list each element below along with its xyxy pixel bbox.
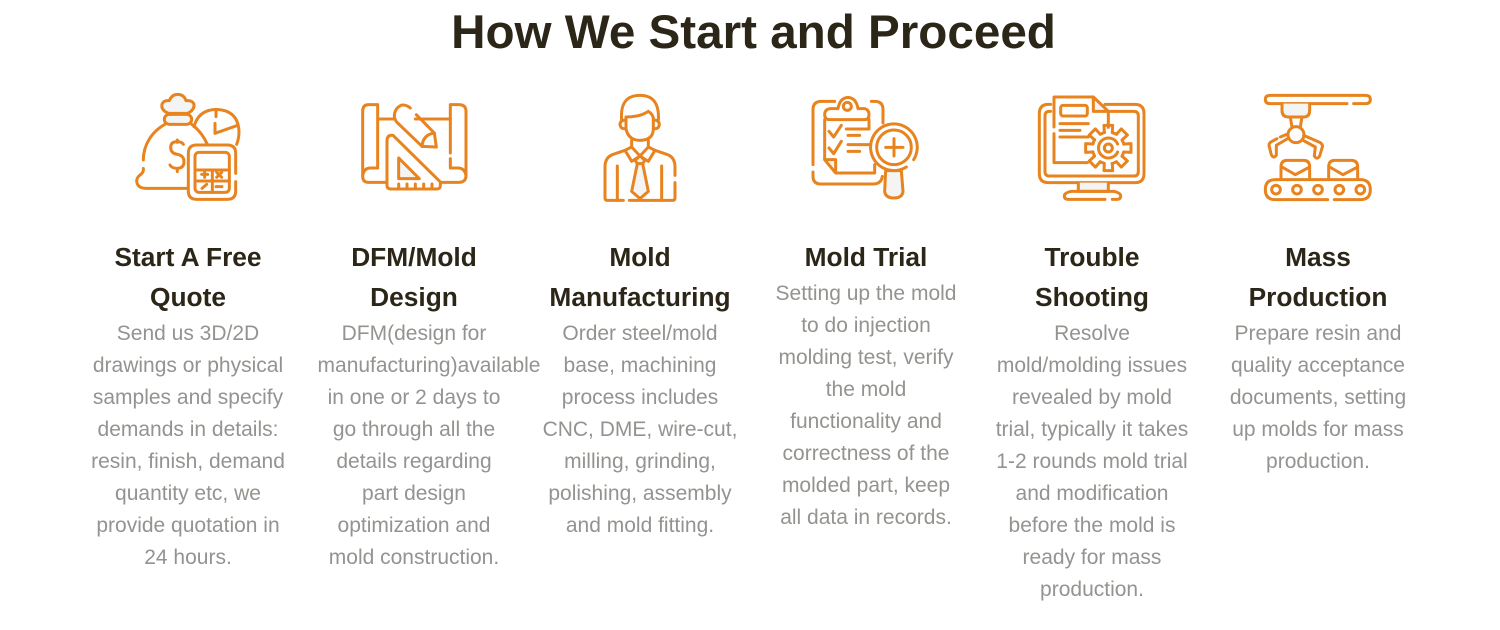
- body text: quality acceptance: [1231, 354, 1405, 377]
- body text: the mold: [826, 378, 906, 401]
- body text: to do injection: [801, 314, 931, 337]
- body text: resin, finish, demand: [91, 450, 285, 473]
- body text: correctness of the: [783, 442, 949, 465]
- icon: robot gripper over conveyor: [1264, 94, 1372, 202]
- body text: CNC, DME, wire-cut,: [543, 418, 737, 441]
- body text: documents, setting: [1230, 386, 1406, 409]
- body text: Resolve: [1054, 322, 1130, 345]
- body text: ready for mass: [1023, 546, 1161, 569]
- body text: Send us 3D/2D: [117, 322, 259, 345]
- panel: mass production: [1230, 94, 1406, 473]
- icon: clipboard checklist and magnifier: [812, 96, 919, 200]
- panel: start a free quote: [91, 92, 285, 569]
- body text: go through all the: [333, 418, 495, 441]
- heading: Production: [1249, 282, 1387, 312]
- panel: mold trial: [776, 96, 956, 529]
- heading: Design: [370, 282, 458, 312]
- heading: [1035, 242, 1149, 312]
- body text: and mold fitting.: [566, 514, 714, 537]
- body text: polishing, assembly: [548, 482, 732, 505]
- body text: before the mold is: [1009, 514, 1175, 537]
- heading: Shooting: [1035, 282, 1149, 312]
- heading: Manufacturing: [549, 282, 731, 312]
- body text: manufacturing)available: [318, 354, 540, 377]
- heading: Quote: [150, 282, 226, 312]
- panel: trouble shooting: [996, 95, 1188, 601]
- body text: demands in details:: [98, 418, 278, 441]
- heading: [114, 242, 262, 312]
- body text: base, machining: [564, 354, 716, 377]
- body text: up molds for mass: [1232, 418, 1404, 441]
- body text: provide quotation in: [96, 514, 280, 537]
- body text: trial, typically it takes: [996, 418, 1188, 441]
- heading: [549, 242, 731, 312]
- body text: [318, 322, 540, 569]
- body text: functionality and: [790, 410, 942, 433]
- body text: Setting up the mold: [776, 282, 956, 305]
- body text: 1-2 rounds mold trial: [996, 450, 1188, 473]
- heading: Trouble: [1045, 242, 1139, 272]
- body text: 24 hours.: [144, 546, 232, 569]
- body text: mold construction.: [329, 546, 499, 569]
- body text: details regarding: [336, 450, 492, 473]
- icon: engineer with tie: [604, 94, 676, 202]
- body text: Prepare resin and: [1235, 322, 1401, 345]
- body text: revealed by mold: [1012, 386, 1172, 409]
- icon: blueprint, set square and pencil: [361, 103, 468, 190]
- icon: money bag, clock and calculator: [135, 92, 240, 201]
- body text: optimization and: [338, 514, 490, 537]
- body text: all data in records.: [780, 506, 952, 529]
- body text: [91, 322, 285, 569]
- body text: molding test, verify: [778, 346, 954, 369]
- icon: monitor with document and gear: [1038, 95, 1146, 201]
- panel: DFM/mold design: [318, 103, 540, 569]
- body text: [996, 322, 1188, 601]
- body text: molded part, keep: [782, 474, 950, 497]
- body text: mold/molding issues: [997, 354, 1187, 377]
- body text: Order steel/mold: [562, 322, 718, 345]
- body text: samples and specify: [93, 386, 283, 409]
- heading: [1249, 242, 1387, 312]
- body text: DFM(design for: [342, 322, 486, 345]
- body text: and modification: [1016, 482, 1168, 505]
- body text: part design: [362, 482, 466, 505]
- title: How We Start and Proceed: [451, 6, 1056, 59]
- body text: drawings or physical: [93, 354, 283, 377]
- body text: [543, 322, 737, 537]
- heading: Mass: [1285, 242, 1351, 272]
- body text: production.: [1266, 450, 1370, 473]
- body text: [1230, 322, 1406, 473]
- panel: mold manufacturing: [543, 94, 737, 537]
- heading: Mold Trial: [805, 242, 927, 272]
- body text: production.: [1040, 578, 1144, 601]
- body text: milling, grinding,: [564, 450, 716, 473]
- body text: in one or 2 days to: [328, 386, 500, 409]
- heading: [351, 242, 477, 312]
- body text: quantity etc, we: [115, 482, 261, 505]
- body text: [776, 282, 956, 529]
- heading: Mold: [609, 242, 671, 272]
- heading: DFM/Mold: [351, 242, 477, 272]
- body text: process includes: [562, 386, 718, 409]
- heading: Start A Free: [114, 242, 262, 272]
